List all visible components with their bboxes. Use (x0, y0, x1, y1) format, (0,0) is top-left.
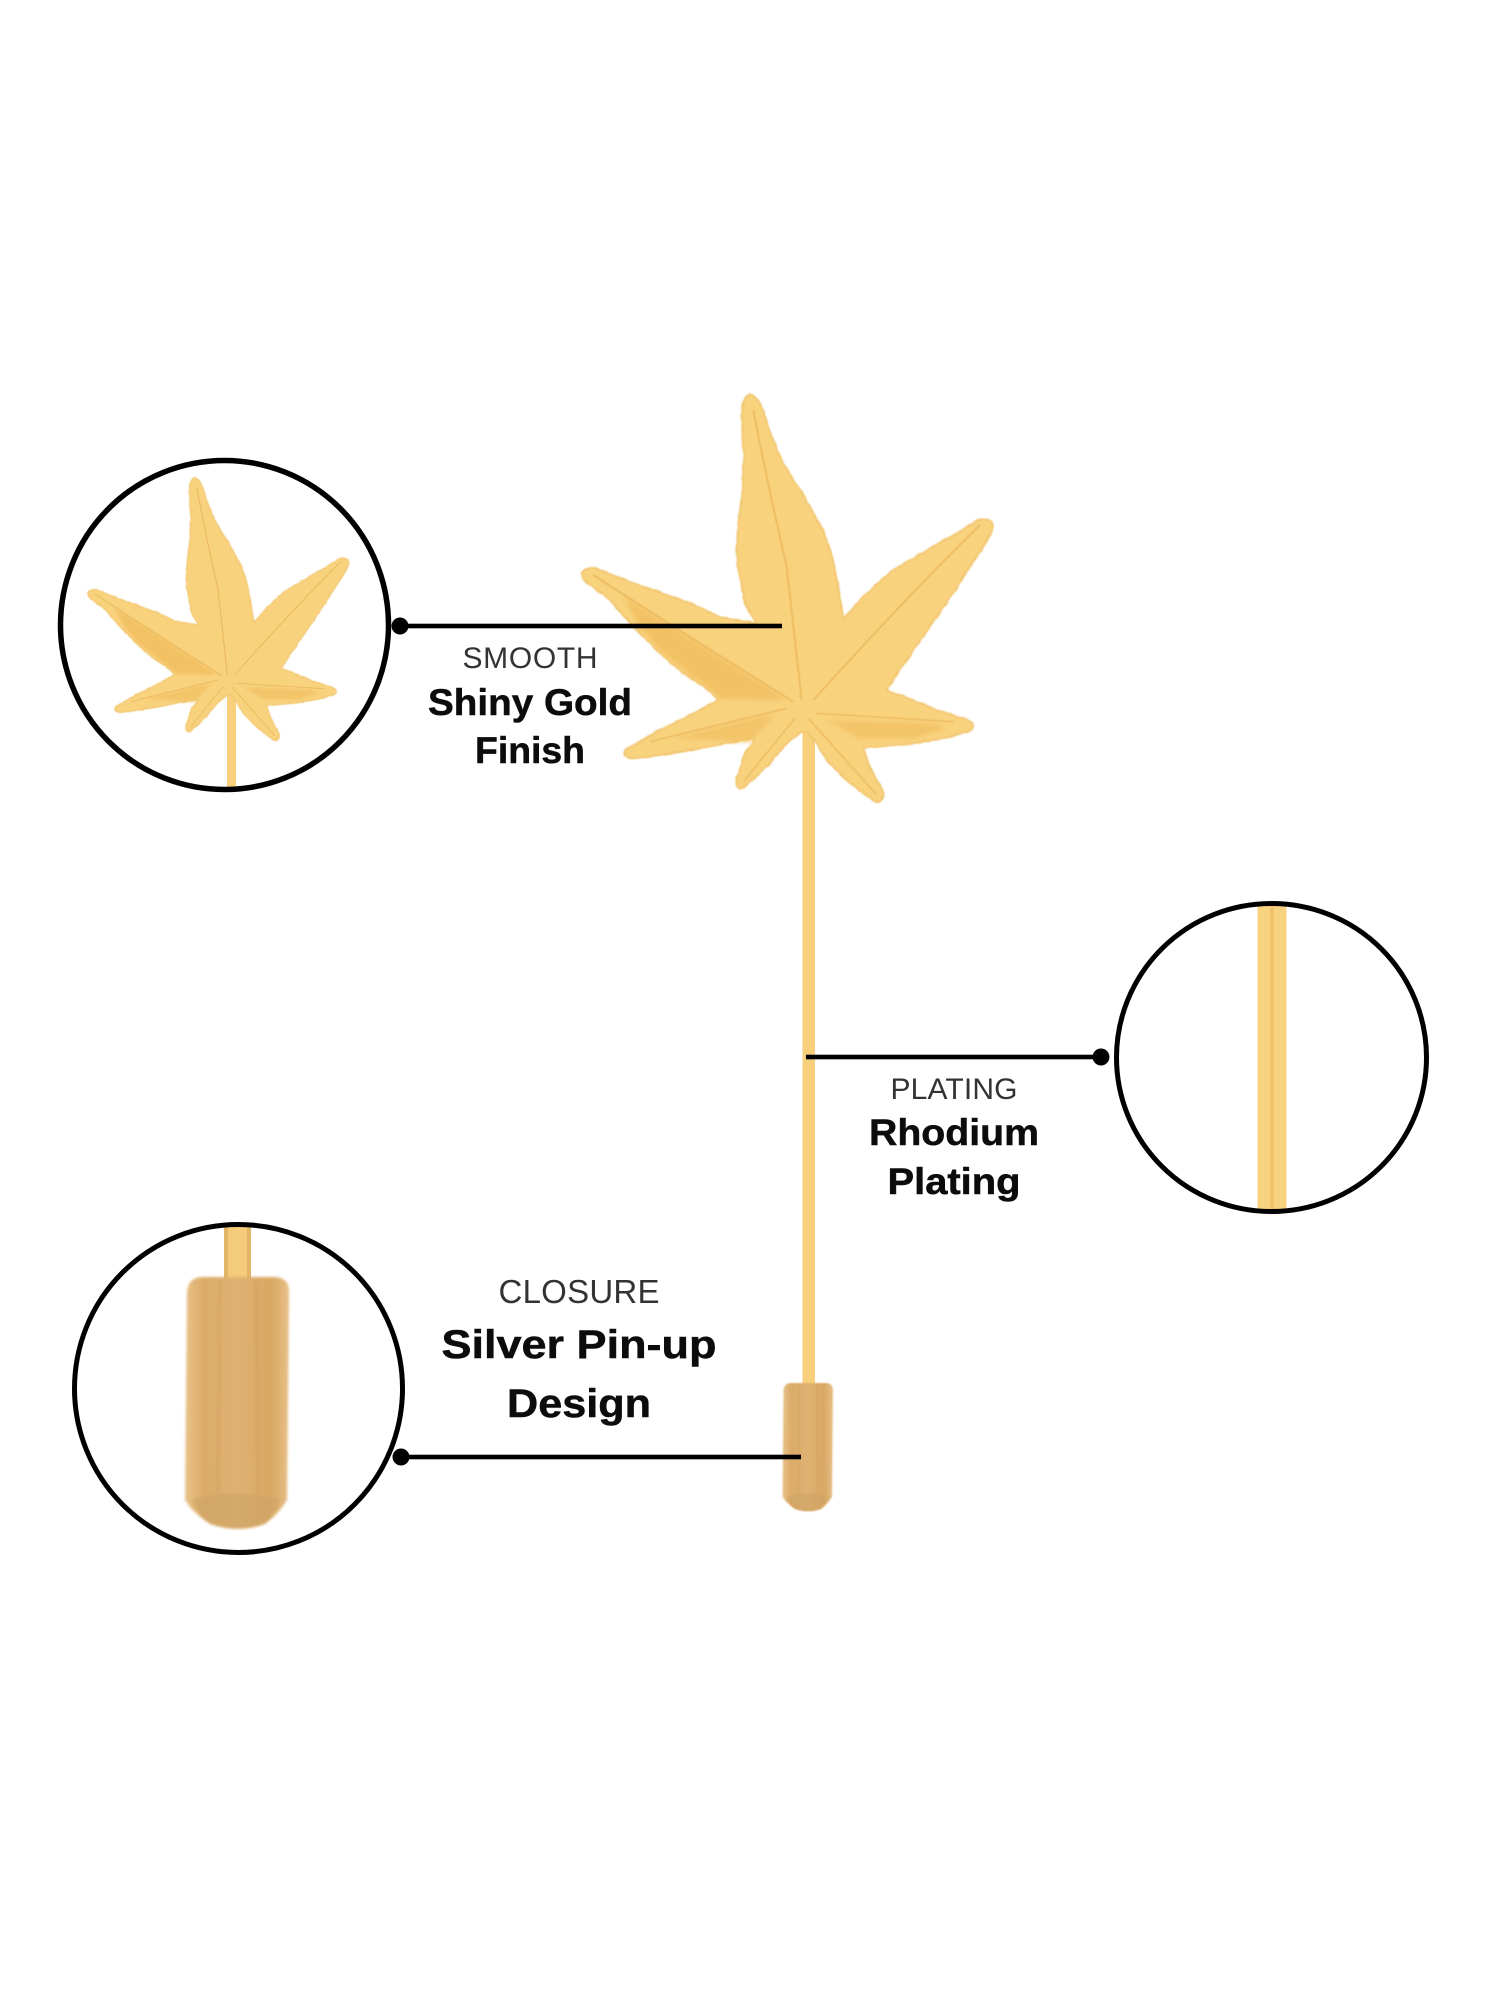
callout: smooth finish (60, 460, 782, 790)
heading: Shiny Gold Finish (428, 682, 632, 771)
pin stopper (783, 1383, 833, 1512)
connector line with dot (392, 618, 782, 634)
inset circle: stem detail (1116, 903, 1426, 1212)
pin product (582, 394, 993, 1512)
heading: Shiny Gold Finish: Finish (475, 730, 585, 771)
heading: Silver Pin-up Design: Silver Pin-up (442, 1323, 716, 1367)
inset circle: stopper detail (74, 1224, 402, 1552)
connector line with dot (392, 1448, 801, 1466)
connector line with dot (806, 1048, 1110, 1066)
heading: Rhodium Plating: Plating (888, 1161, 1020, 1202)
heading: Shiny Gold Finish: Shiny Gold (428, 682, 632, 723)
label: PLATING: PLATING (890, 1073, 1018, 1106)
callout: closure (74, 1224, 801, 1552)
label: CLOSURE: CLOSURE (498, 1273, 660, 1310)
heading: Rhodium Plating: Rhodium (869, 1112, 1039, 1153)
callout: plating (806, 903, 1426, 1212)
label: SMOOTH: SMOOTH (462, 642, 598, 675)
heading: Silver Pin-up Design: Design (507, 1382, 651, 1426)
heading: Silver Pin-up Design (442, 1323, 716, 1426)
leaf head (582, 394, 993, 802)
heading: Rhodium Plating (869, 1112, 1039, 1202)
inset circle: leaf detail (60, 460, 388, 790)
pin stem (802, 730, 815, 1385)
